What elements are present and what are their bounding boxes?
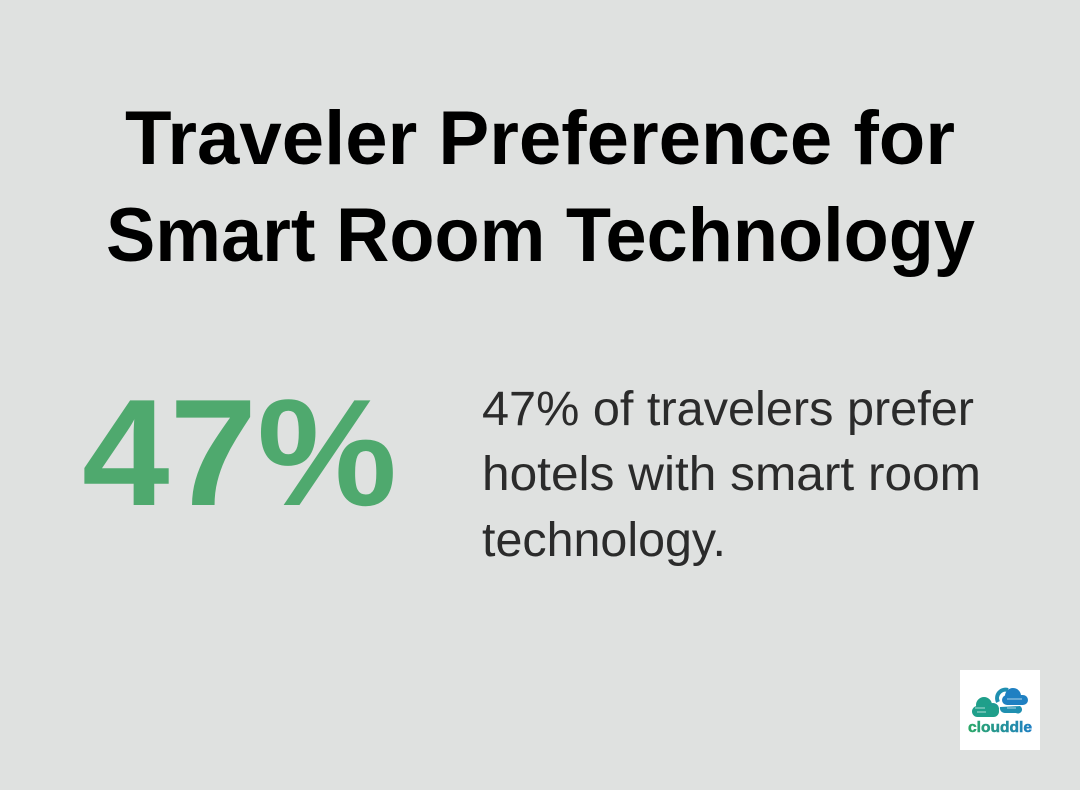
logo wordmark: clouddle (968, 719, 1032, 736)
description text: hotels with smart room (482, 448, 981, 501)
title: Traveler Preference for (125, 96, 955, 181)
title (106, 96, 975, 278)
title: Smart Room Technology (106, 193, 975, 278)
big statistic: 47% (82, 368, 397, 538)
logo: clouddle (960, 670, 1040, 750)
icon: left cloud (972, 697, 999, 717)
icon: right cloud (997, 688, 1028, 714)
description text (482, 383, 981, 567)
description text: technology. (482, 514, 726, 567)
description text: 47% of travelers prefer (482, 383, 974, 436)
